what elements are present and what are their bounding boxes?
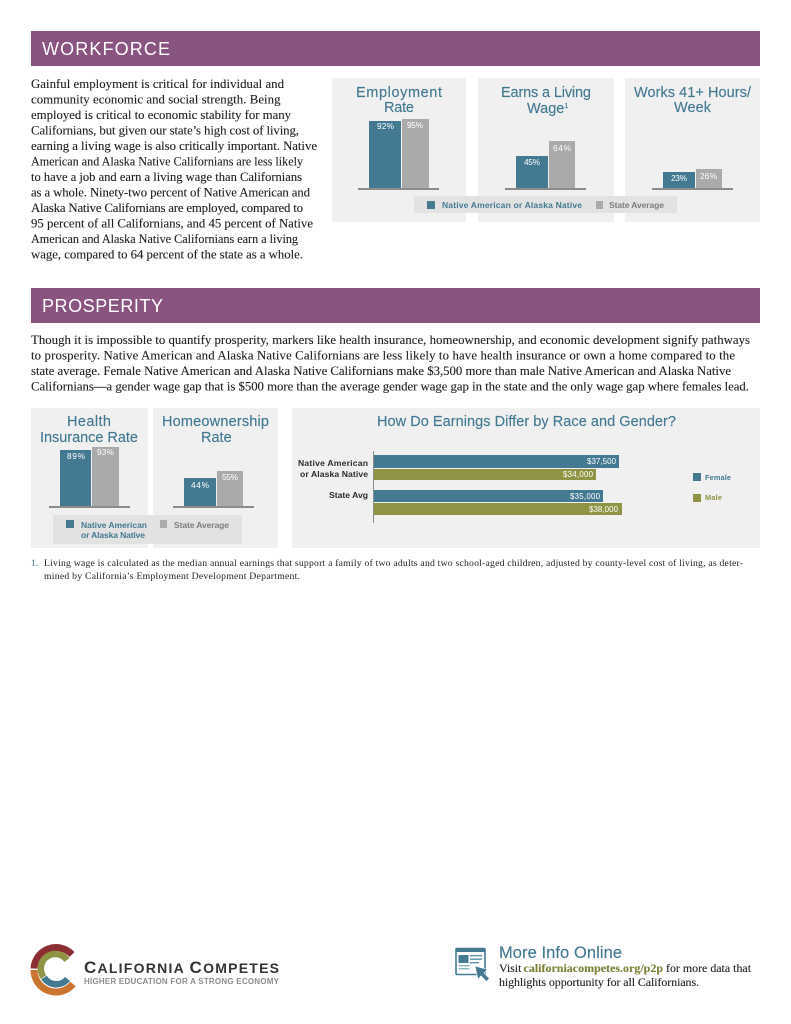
panel: earnings by race and gender: $37,500 [587, 457, 617, 466]
footnote: 1. [31, 558, 38, 569]
text block: workforce intro: Alaska Native Californians are employed, compared to [31, 201, 303, 215]
panel: health insurance rate: Health [67, 414, 111, 430]
logo: California Competes [34, 948, 280, 992]
panel: earnings by race and gender [292, 408, 760, 548]
text block: workforce intro: employed is critical to economic stability for many [31, 108, 292, 122]
panel: earns a living wage [478, 78, 614, 222]
legend: prosperity charts: Native American [81, 520, 147, 530]
callout: more info online: More Info Online [499, 944, 622, 962]
panel: homeownership rate: 44% [191, 480, 210, 490]
panel: earnings by race and gender: $38,000 [589, 505, 619, 514]
panel: earns a living wage: 45% [524, 157, 541, 167]
heading: workforce: WORKFORCE [42, 39, 170, 59]
footnote [31, 558, 743, 582]
text block: prosperity intro: Though it is impossible to quantify prosperity, markers like health insurance, homeownership, and economic development signify pathways [31, 333, 750, 347]
callout: more info online: for more data that [666, 961, 752, 975]
callout: more info online: Visit [499, 961, 522, 975]
panel: homeownership rate [153, 408, 278, 548]
panel: earnings by race and gender: State Avg [329, 490, 368, 500]
panel: earnings by race and gender: $35,000 [570, 492, 601, 501]
panel: employment rate: Rate [384, 100, 414, 116]
text block: workforce intro: American and Alaska Native Californians earn a living [31, 232, 299, 246]
heading: workforce [31, 31, 760, 66]
panel: earnings by race and gender: Female [705, 473, 731, 482]
icon: logo ring [34, 948, 73, 992]
legend: workforce charts: Native American or Alaska Native [442, 200, 582, 210]
text block: workforce intro: as a whole. Ninety-two percent of Native American and [31, 186, 311, 200]
logo: California Competes: CALIFORNIA COMPETES [84, 958, 279, 977]
text block: workforce intro: community economic and social strength. Being [31, 92, 281, 106]
legend: prosperity charts: or Alaska Native [81, 530, 145, 540]
text block: prosperity intro: to prosperity. Native American and Alaska Native Californians are less likely to have health insurance or own a home compared to the [31, 348, 735, 362]
callout: more info online: highlights opportunity for all Californians. [499, 975, 699, 989]
panel: earnings by race and gender: How Do Earnings Differ by Race and Gender? [377, 414, 676, 430]
legend: workforce charts: State Average [609, 200, 664, 210]
panel: employment rate [332, 78, 466, 222]
panel: earnings by race and gender: Male [705, 493, 722, 502]
icon: browser window with cursor [456, 948, 490, 982]
panel: earns a living wage: Earns a Living [501, 85, 591, 101]
legend: workforce charts [414, 196, 677, 213]
panel: health insurance rate [31, 408, 148, 548]
callout: more info online [499, 944, 752, 989]
text block: workforce intro: earning a living wage is also critically important. Native [31, 139, 317, 153]
panel: employment rate: 92% [377, 121, 395, 131]
heading: prosperity [31, 288, 760, 323]
text block: workforce intro: 95 percent of all Californians, and 45 percent of Native [31, 216, 313, 230]
panel: homeownership rate: Homeownership [162, 414, 269, 430]
text block: workforce intro: wage, compared to 64 percent of the state as a whole. [31, 248, 303, 262]
panel: earns a living wage: Wage [527, 101, 564, 117]
text block: workforce intro [31, 77, 317, 262]
text block: workforce intro: to have a job and earn a living wage than Californians [31, 170, 302, 184]
panel: employment rate: 95% [407, 120, 424, 130]
panel: works 41+ hours per week: Week [674, 100, 712, 116]
panel: earns a living wage: 64% [553, 143, 572, 153]
legend: prosperity charts: State Average [174, 520, 229, 530]
footnote: Living wage is calculated as the median annual earnings that support a family of two adults and two school-aged children, adjusted by county-level cost of living, as deter- [44, 558, 743, 569]
panel: health insurance rate: Insurance Rate [40, 430, 138, 446]
panel: works 41+ hours per week: Works 41+ Hours/ [634, 85, 752, 101]
callout: more info online: californiacompetes.org/p2p [524, 961, 663, 975]
panel: homeownership rate: Rate [201, 430, 232, 446]
logo: California Competes: HIGHER EDUCATION FOR A STRONG ECONOMY [84, 977, 280, 986]
panel: earns a living wage: 1 [564, 103, 568, 110]
legend: prosperity charts [53, 515, 242, 544]
panel: homeownership rate: 55% [222, 472, 239, 482]
panel: works 41+ hours per week [625, 78, 760, 222]
panel: earnings by race and gender: $34,000 [563, 470, 594, 479]
text block: workforce intro: Californians, but given our state’s high cost of living, [31, 124, 299, 138]
panel: earnings by race and gender: or Alaska Native [300, 469, 368, 479]
panel: health insurance rate: 93% [97, 447, 115, 457]
panel: employment rate: Employment [356, 85, 442, 101]
panel: works 41+ hours per week: 23% [671, 173, 688, 183]
panel: earnings by race and gender: Native American [298, 458, 368, 468]
footnote: mined by California’s Employment Development Department. [44, 571, 300, 582]
text block: workforce intro: American and Alaska Native Californians are less likely [31, 154, 304, 168]
panel: works 41+ hours per week: 26% [700, 171, 718, 181]
heading: prosperity: PROSPERITY [42, 296, 163, 316]
text block: prosperity intro: state average. Female Native American and Alaska Native Californians make $3,500 more than male Native American and Alaska Native [31, 364, 731, 378]
text block: prosperity intro [31, 333, 750, 394]
text block: prosperity intro: Californians—a gender wage gap that is $500 more than the average gender wage gap in the state and the only wage gap where females lead. [31, 380, 749, 394]
text block: workforce intro: Gainful employment is critical for individual and [31, 77, 285, 91]
panel: health insurance rate: 89% [67, 451, 86, 461]
